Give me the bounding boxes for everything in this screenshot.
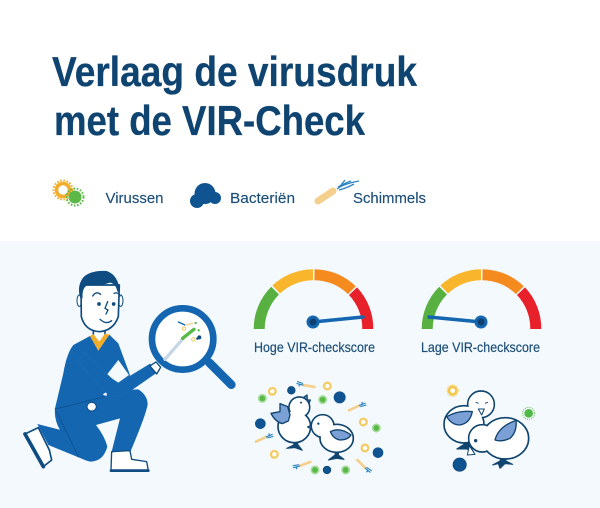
chicks with many pathogens [255,377,383,474]
chick front [467,418,529,468]
face [93,293,120,323]
lower panel background [0,241,600,508]
chick right [308,415,353,460]
needle [429,317,481,322]
torso and legs [55,335,148,462]
gauge arc [259,275,368,329]
man with magnifier [25,271,231,471]
title: Verlaag de virusdruk [52,48,418,95]
magnifier [209,363,231,385]
chicks with few pathogens [444,385,535,471]
bacterium [453,458,466,471]
back foot [25,428,52,467]
title [52,48,418,144]
chick left [271,395,311,450]
back lower leg [37,424,93,462]
collar [90,333,109,351]
ears [77,295,82,306]
gap between arm and torso [107,360,129,383]
label: Bacterien: Bacteriën [230,190,295,207]
particles in lens [178,322,201,341]
gauge: hoge score [254,275,375,355]
yellow virus [449,387,456,394]
pathogens [255,377,383,474]
lower arm [95,393,120,410]
label: Lage VIR-checkscore [421,339,540,355]
gauge: lage score [421,275,540,355]
chick back [444,391,494,452]
swab in lens [165,338,183,359]
front foot [111,451,148,471]
leg and waist lines [55,397,105,457]
label: Virussen: Virussen [106,190,164,207]
small gap [103,392,107,396]
needle [313,317,363,322]
label: Hoge VIR-checkscore [254,339,375,355]
legend [54,180,426,208]
hand lower [87,402,96,411]
icon: bacterien [190,183,221,208]
hand [150,362,161,374]
label: Schimmels: Schimmels [353,190,426,207]
icon: schimmels [318,180,359,201]
gauge arc [427,275,536,329]
upper arm [77,353,159,397]
neck [93,328,105,343]
head [81,285,119,332]
hair [79,271,120,298]
green virus [524,409,533,418]
icon: virussen [54,180,84,206]
title: met de VIR-Check [54,97,366,144]
